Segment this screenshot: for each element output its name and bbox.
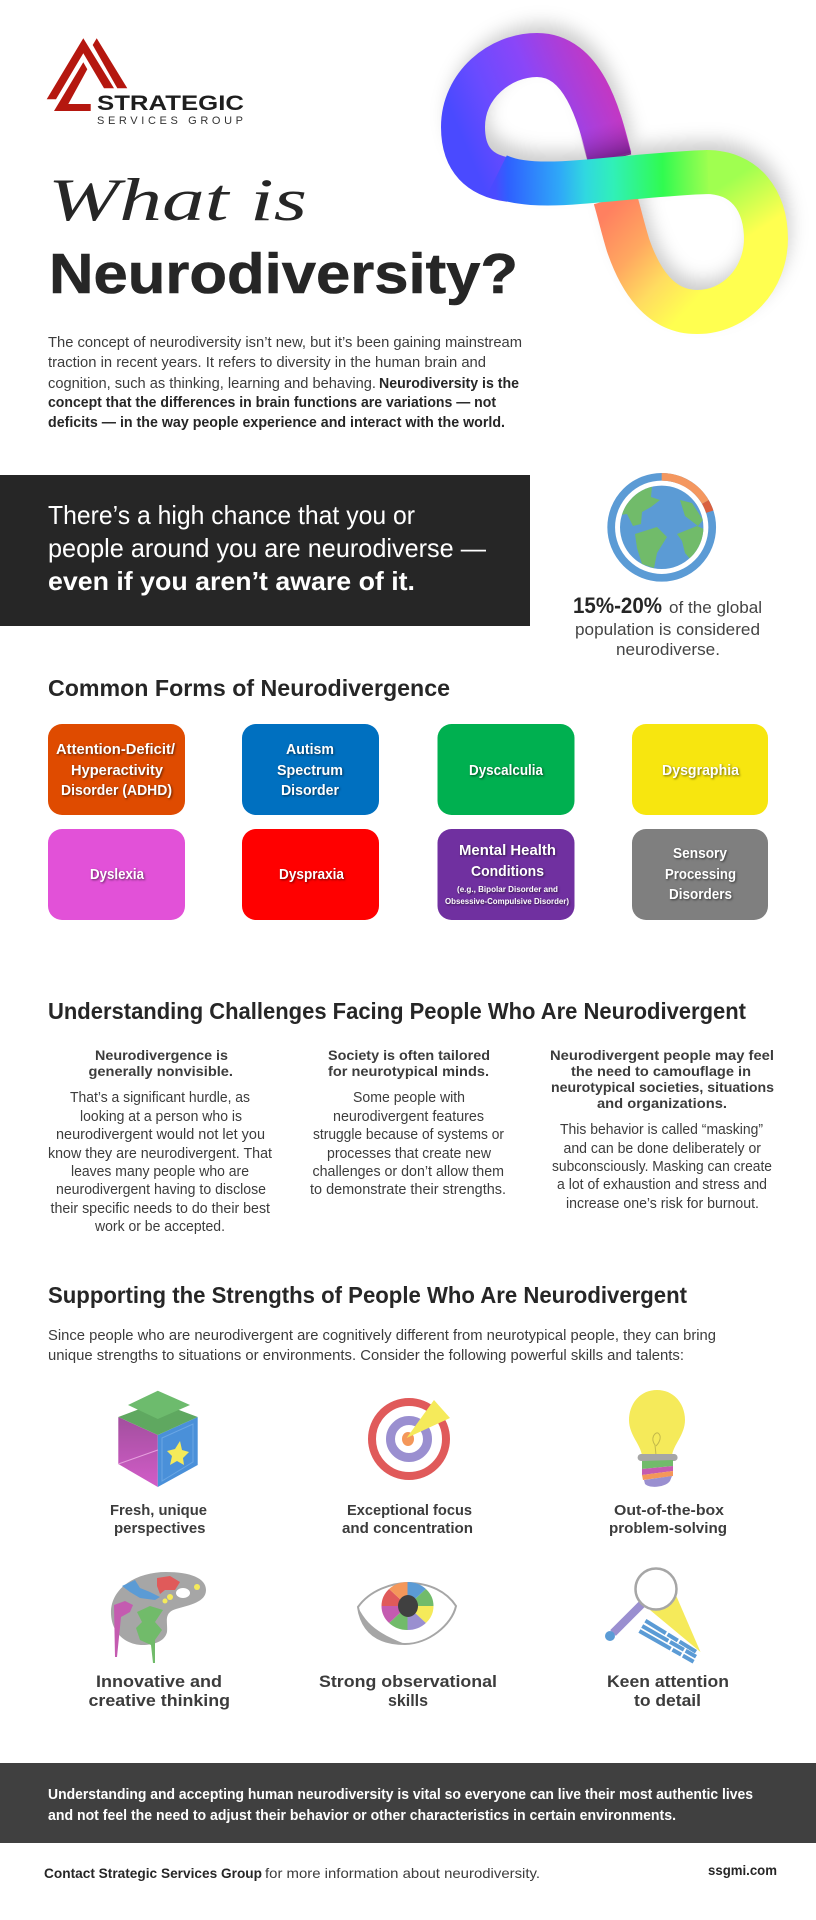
label: Strong observational skills: skills bbox=[388, 1691, 428, 1710]
tile: Sensory Processing Disorders: Sensory bbox=[673, 845, 728, 862]
column heading: generally nonvisible. bbox=[88, 1063, 233, 1079]
column text: increase one’s risk for burnout. bbox=[566, 1196, 759, 1212]
intro paragraph: cognition, such as thinking, learning and behaving. bbox=[48, 376, 376, 392]
title: Neurodiversity?: Neurodiversity? bbox=[49, 242, 518, 306]
column text: know they are neurodivergent. That bbox=[48, 1146, 272, 1162]
label: Innovative and creative thinking: creative thinking bbox=[88, 1691, 230, 1710]
column heading: the need to camouflage in bbox=[571, 1063, 751, 1079]
column heading: Neurodivergence is bbox=[95, 1047, 228, 1063]
logo: Strategic Services Group bbox=[47, 38, 244, 127]
label: Out-of-the-box problem-solving bbox=[609, 1503, 727, 1537]
tile: Dysgraphia bbox=[632, 724, 768, 815]
column text: struggle because of systems or bbox=[313, 1127, 504, 1143]
icon: isometric box with star bbox=[118, 1391, 198, 1487]
tile: ADHD: Attention-Deficit/ bbox=[56, 741, 176, 758]
column text: This behavior is called “masking” bbox=[560, 1122, 763, 1138]
callout text: people around you are neurodiverse — bbox=[48, 533, 486, 563]
column heading bbox=[550, 1047, 774, 1111]
column text: challenges or don’t allow them bbox=[312, 1164, 504, 1180]
column text bbox=[552, 1122, 772, 1212]
label: Innovative and creative thinking: Innovative and bbox=[96, 1672, 222, 1691]
stat: 15%-20% of the global population: of the global bbox=[669, 598, 762, 617]
tile: ADHD bbox=[48, 724, 185, 815]
stat: 15%-20% of the global population: 15%-20% bbox=[573, 593, 662, 618]
panel: challenge column 1 bbox=[48, 1047, 272, 1235]
intro paragraph bbox=[48, 335, 522, 431]
tile: Dyspraxia: Dyspraxia bbox=[279, 866, 345, 883]
callout text bbox=[48, 500, 486, 596]
tile: Dysgraphia: Dysgraphia bbox=[662, 762, 740, 779]
column text: and can be done deliberately or bbox=[564, 1141, 761, 1157]
column text: processes that create new bbox=[327, 1146, 492, 1162]
column text: a lot of exhaustion and stress and bbox=[557, 1177, 767, 1193]
stat: 15%-20% of the global population: population is considered bbox=[575, 620, 760, 639]
label: Innovative and creative thinking bbox=[88, 1672, 230, 1710]
icon: light bulb bbox=[629, 1390, 685, 1487]
heading: Common Forms of Neurodivergence: Common Forms of Neurodivergence bbox=[48, 675, 450, 701]
footer contact line: for more information about neurodiversity. bbox=[265, 1865, 540, 1881]
tile: Dyslexia bbox=[48, 829, 185, 920]
column text: to demonstrate their strengths. bbox=[310, 1182, 506, 1198]
intro paragraph: deficits — in the way people experience and interact with the world. bbox=[48, 415, 505, 431]
icon: target with arrow bbox=[372, 1400, 450, 1476]
intro paragraph: concept that the differences in brain functions are variations — not bbox=[48, 395, 496, 411]
tile: Mental Health Conditions: Mental Health bbox=[459, 842, 556, 859]
column heading: neurotypical societies, situations bbox=[551, 1079, 774, 1095]
strengths intro text: unique strengths to situations or environments. Consider the following powerful skills and talents: bbox=[48, 1348, 684, 1364]
panel: dark callout banner bbox=[0, 475, 530, 626]
label: Strong observational skills: Strong observational bbox=[319, 1672, 497, 1691]
label: Exceptional focus and concentration: Exceptional focus bbox=[347, 1503, 472, 1519]
panel: challenge column 2 bbox=[310, 1047, 506, 1198]
logo name: STRATEGIC bbox=[97, 92, 244, 115]
tile: Mental Health Conditions: Conditions bbox=[471, 863, 544, 880]
column heading: and organizations. bbox=[597, 1095, 727, 1111]
tile: Dyscalculia bbox=[438, 724, 574, 815]
column text bbox=[48, 1090, 272, 1235]
column text: leaves many people who are bbox=[71, 1164, 249, 1180]
tile: Mental Health Conditions: (e.g., Bipolar Disorder and bbox=[457, 884, 558, 894]
footer contact line bbox=[44, 1865, 540, 1881]
column text: neurodivergent would not let you bbox=[56, 1127, 265, 1143]
label: Fresh, unique perspectives: perspectives bbox=[114, 1521, 206, 1537]
column heading bbox=[328, 1047, 490, 1079]
panel: challenge column 3 bbox=[550, 1047, 774, 1212]
column text: their specific needs to do their best bbox=[50, 1201, 270, 1217]
tile: Autism Spectrum Disorder: Spectrum bbox=[277, 762, 343, 779]
column text: looking at a person who is bbox=[80, 1109, 242, 1125]
panel: forms of neurodivergence tiles bbox=[48, 724, 768, 920]
strengths intro text bbox=[48, 1328, 716, 1364]
column text bbox=[310, 1090, 506, 1198]
column heading: for neurotypical minds. bbox=[328, 1063, 489, 1079]
label: Out-of-the-box problem-solving: Out-of-the-box bbox=[614, 1503, 724, 1519]
label: Keen attention to detail: Keen attention bbox=[607, 1672, 729, 1691]
label: Out-of-the-box problem-solving: problem-solving bbox=[609, 1521, 727, 1537]
label: Fresh, unique perspectives: Fresh, unique bbox=[110, 1503, 207, 1519]
tile: Mental Health Conditions: Obsessive-Compulsive Disorder) bbox=[445, 896, 569, 906]
heading: Understanding Challenges: Understanding Challenges Facing People Who Are Neurodivergent bbox=[48, 998, 746, 1024]
tile: Sensory Processing Disorders bbox=[632, 829, 768, 920]
logo tagline: SERVICES GROUP bbox=[97, 115, 243, 127]
tile: Autism Spectrum Disorder: Disorder bbox=[281, 782, 339, 799]
icon: paint palette bbox=[111, 1572, 206, 1663]
callout text: There’s a high chance that you or bbox=[48, 500, 415, 530]
footer contact line: Contact Strategic Services Group bbox=[44, 1865, 262, 1881]
intro paragraph: traction in recent years. It refers to diversity in the human brain and bbox=[48, 355, 486, 371]
intro paragraph: The concept of neurodiversity isn’t new, but it’s been gaining mainstream bbox=[48, 335, 522, 351]
label: Keen attention to detail bbox=[607, 1672, 729, 1710]
tile: Sensory Processing Disorders: Processing bbox=[665, 866, 736, 883]
tile: Dyscalculia: Dyscalculia bbox=[469, 762, 544, 779]
label: Keen attention to detail: to detail bbox=[634, 1691, 701, 1710]
tile: ADHD: Disorder (ADHD) bbox=[61, 782, 172, 799]
strengths intro text: Since people who are neurodivergent are cognitively different from neurotypical people, they can bring bbox=[48, 1328, 716, 1344]
label: Exceptional focus and concentration: and concentration bbox=[342, 1521, 473, 1537]
label: Fresh, unique perspectives bbox=[110, 1503, 207, 1537]
icon: colourful eye bbox=[358, 1582, 456, 1644]
heading: Supporting the Strengths: Supporting the Strengths of People Who Are Neurodivergent bbox=[48, 1282, 687, 1308]
icon: red peaks bbox=[47, 38, 127, 111]
column text: That’s a significant hurdle, as bbox=[70, 1090, 250, 1106]
icon: rainbow infinity ribbon bbox=[463, 43, 771, 312]
closing text bbox=[48, 1787, 753, 1824]
column text: Some people with bbox=[353, 1090, 465, 1106]
tile: Autism Spectrum Disorder: Autism bbox=[286, 741, 334, 758]
closing text: and not feel the need to adjust their behavior or other characteristics in certain environments. bbox=[48, 1808, 676, 1824]
tile: ADHD: Hyperactivity bbox=[71, 762, 164, 779]
tile: Mental Health Conditions bbox=[438, 829, 574, 920]
icon: globe with 15-20 percent ring bbox=[611, 477, 712, 578]
tile: Dyslexia: Dyslexia bbox=[90, 866, 145, 883]
callout text: even if you aren’t aware of it. bbox=[48, 566, 415, 596]
tile: Autism Spectrum Disorder bbox=[242, 724, 379, 815]
column text: neurodivergent having to disclose bbox=[56, 1182, 266, 1198]
closing text: Understanding and accepting human neurodiversity is vital so everyone can live their most authentic lives bbox=[48, 1787, 753, 1803]
stat: 15%-20% of the global population: neurodiverse. bbox=[616, 640, 720, 659]
title script: What is: What is bbox=[48, 167, 307, 233]
column text: neurodivergent features bbox=[333, 1109, 484, 1125]
stat: 15%-20% of the global population bbox=[573, 593, 762, 659]
label: Exceptional focus and concentration bbox=[342, 1503, 473, 1537]
intro paragraph: Neurodiversity is the bbox=[379, 376, 519, 392]
footer website: ssgmi.com bbox=[708, 1863, 777, 1878]
column heading: Society is often tailored bbox=[328, 1047, 490, 1063]
tile: Sensory Processing Disorders: Disorders bbox=[669, 886, 732, 903]
column text: work or be accepted. bbox=[94, 1219, 225, 1235]
column heading: Neurodivergent people may feel bbox=[550, 1047, 774, 1063]
column heading bbox=[88, 1047, 233, 1079]
tile: Dyspraxia bbox=[242, 829, 379, 920]
column text: subconsciously. Masking can create bbox=[552, 1159, 772, 1175]
label: Strong observational skills bbox=[319, 1672, 497, 1710]
icon: magnifying glass bbox=[605, 1568, 700, 1662]
panel: closing statement band bbox=[0, 1763, 816, 1843]
